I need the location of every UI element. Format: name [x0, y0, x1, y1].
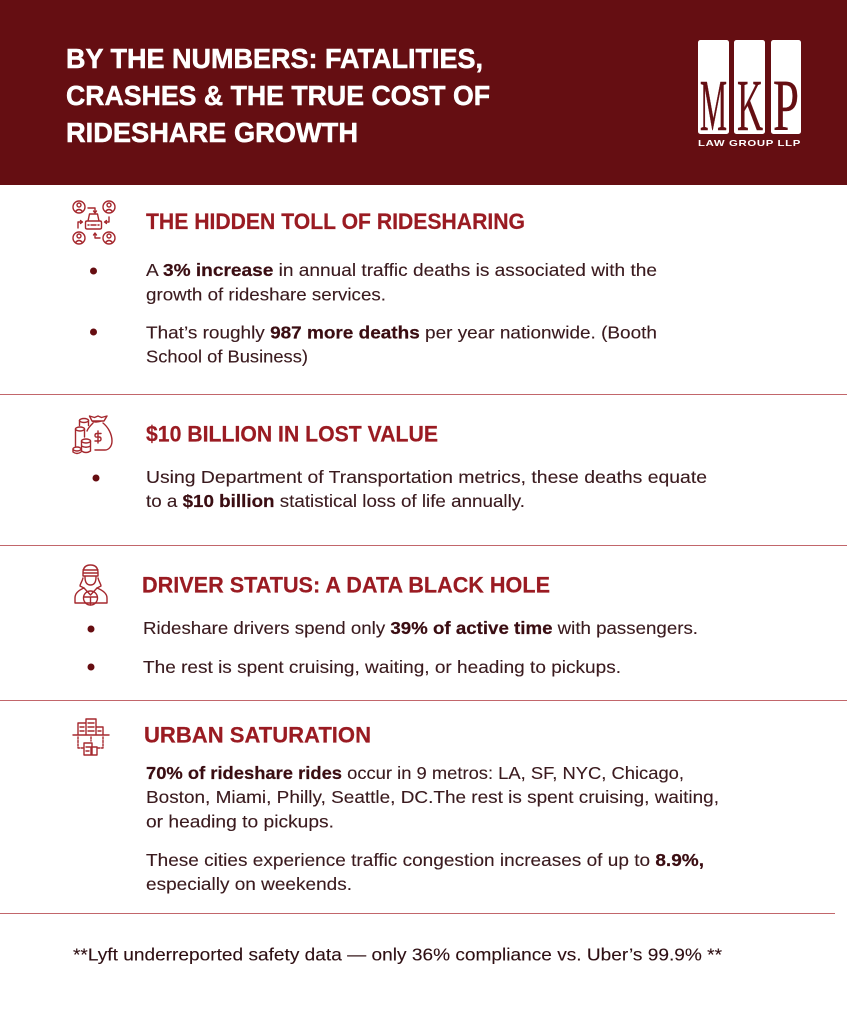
heading: DRIVER STATUS: A DATA BLACK HOLE	[142, 572, 550, 598]
paragraph one: 70% of rideshare rides occur in 9 metros: LA, SF, NYC, Chicago,	[146, 763, 684, 783]
bullet: to a $10 billion statistical loss of life annually.	[146, 491, 525, 511]
panel: urban saturation	[73, 719, 719, 894]
paragraph two	[146, 850, 704, 894]
panel: driver status	[75, 565, 698, 677]
paragraph one: or heading to pickups.	[146, 812, 334, 832]
footnote: **Lyft underreported safety data — only 36% compliance vs. Uber’s 99.9% **	[73, 944, 722, 964]
title: CRASHES & THE TRUE COST OF	[66, 80, 490, 111]
title: BY THE NUMBERS: FATALITIES,	[66, 43, 483, 74]
panel: $10 billion in lost value	[73, 416, 707, 511]
logo: MKP Law Group LLP: K	[737, 65, 763, 146]
bullet two: That’s roughly 987 more deaths per year nationwide. (Booth	[146, 322, 657, 342]
paragraph one: Boston, Miami, Philly, Seattle, DC.The rest is spent cruising, waiting,	[146, 787, 719, 807]
bullet one: growth of rideshare services.	[146, 284, 386, 304]
logo: MKP Law Group LLP: P	[773, 65, 799, 146]
bullet one	[90, 260, 657, 304]
paragraph two: These cities experience traffic congestion increases of up to 8.9%,	[146, 850, 704, 870]
logo: MKP Law Group LLP: LAW GROUP LLP	[698, 138, 801, 148]
paragraph one	[146, 763, 719, 832]
header banner	[0, 0, 847, 185]
bullet two	[90, 322, 657, 366]
logo: MKP Law Group LLP: M	[700, 65, 727, 146]
title	[66, 43, 490, 148]
bullet two: School of Business)	[146, 346, 308, 366]
logo: MKP Law Group LLP	[698, 40, 801, 148]
heading: URBAN SATURATION	[144, 722, 371, 748]
paragraph two: especially on weekends.	[146, 874, 352, 894]
bullet one: A 3% increase in annual traffic deaths is associated with the	[146, 260, 657, 280]
icon: car with passengers	[73, 201, 115, 244]
bullet: Using Department of Transportation metrics, these deaths equate	[146, 467, 707, 487]
bullet	[92, 467, 707, 511]
bullet one: Rideshare drivers spend only 39% of active time with passengers.	[143, 618, 698, 638]
panel: the hidden toll of ridesharing	[73, 201, 657, 366]
icon: driver at wheel	[75, 565, 107, 605]
heading: $10 BILLION IN LOST VALUE	[146, 422, 438, 446]
title: RIDESHARE GROWTH	[66, 117, 358, 148]
heading: THE HIDDEN TOLL OF RIDESHARING	[146, 209, 525, 234]
icon: city buildings	[73, 719, 109, 755]
bullet two: The rest is spent cruising, waiting, or heading to pickups.	[143, 657, 621, 677]
icon: money bag and coins	[73, 416, 112, 454]
